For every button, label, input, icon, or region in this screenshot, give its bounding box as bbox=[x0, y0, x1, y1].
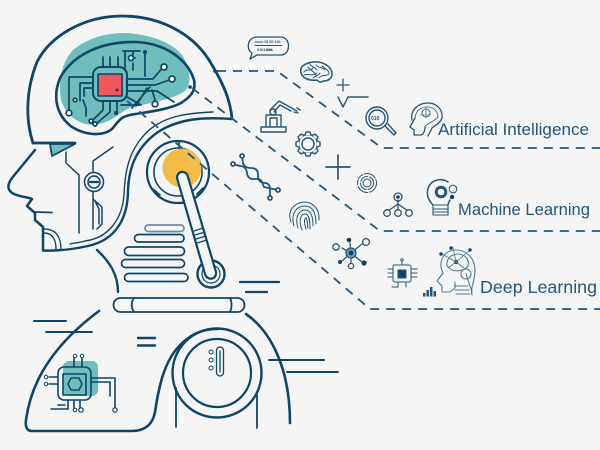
dashed leader lines bbox=[127, 71, 600, 309]
helmet outline bbox=[28, 16, 232, 143]
panel: rib stack bbox=[122, 225, 188, 282]
eye bbox=[50, 144, 75, 156]
neck circuit lines bbox=[66, 147, 113, 233]
icon: fingerprint bbox=[290, 202, 319, 230]
icon: speech bubble: 0101 001 bbox=[257, 48, 273, 52]
icon: network bbox=[333, 238, 369, 269]
panel: robot head bbox=[8, 16, 232, 251]
leader: machine learning bbox=[192, 88, 600, 231]
icon: tree bbox=[384, 193, 412, 216]
neck inner arc bbox=[70, 112, 213, 244]
icon: large plus bbox=[326, 155, 350, 179]
icon: speech bubble bbox=[248, 37, 288, 59]
collar bbox=[114, 298, 244, 312]
neck outer arc bbox=[43, 118, 232, 251]
yellow core bbox=[162, 148, 202, 188]
brain outline bbox=[56, 42, 194, 134]
chin piece bbox=[44, 229, 61, 250]
circuit wires bbox=[66, 51, 175, 126]
icon: speech bubble: 10 00 101 bbox=[264, 40, 281, 44]
leader start dots bbox=[188, 69, 217, 89]
panel: shoulder joint and rod bbox=[147, 141, 224, 288]
icon: plus small bbox=[337, 79, 349, 91]
icon: bars bbox=[423, 287, 436, 296]
label: deep learning: Deep Learning bbox=[480, 277, 597, 297]
panel: torso bbox=[26, 311, 338, 431]
rod bbox=[177, 172, 216, 279]
icon: concentric rings bbox=[358, 174, 376, 192]
icon: robot arm bbox=[261, 101, 300, 132]
lip line bbox=[35, 211, 52, 214]
icon: brain bbox=[301, 62, 332, 82]
icon: magnifier bbox=[366, 107, 396, 135]
teal brain blob bbox=[60, 33, 189, 125]
neck node bbox=[84, 172, 104, 192]
icon: gear bbox=[296, 132, 320, 156]
left torso outline bbox=[26, 311, 217, 431]
speed lines bbox=[240, 282, 279, 292]
label: machine learning: Machine Learning bbox=[458, 200, 590, 219]
icon: small chip bbox=[388, 259, 417, 287]
chip with red core bbox=[93, 67, 127, 101]
rod stripes bbox=[194, 228, 207, 243]
icon: DNA helix bbox=[231, 154, 280, 200]
label: artificial intelligence: Artificial Intelligence bbox=[438, 120, 589, 139]
forehead brow line bbox=[33, 142, 75, 144]
back neck curve bbox=[97, 250, 118, 292]
icon: AI head bbox=[410, 103, 442, 136]
torso chip bbox=[44, 354, 117, 412]
equals sign bbox=[138, 338, 155, 346]
icon: square root bbox=[338, 97, 368, 107]
icon: deep learning head bbox=[437, 246, 475, 295]
joint rings bbox=[147, 141, 209, 203]
leader: deep learning bbox=[127, 101, 600, 309]
large dial bbox=[172, 328, 262, 428]
bottom joint bbox=[198, 260, 224, 288]
icon: lightbulb with gears bbox=[427, 180, 457, 215]
icon: magnifier: 010 bbox=[371, 116, 380, 122]
face profile bbox=[8, 150, 43, 250]
right shoulder bbox=[246, 314, 290, 423]
leader: artificial intelligence bbox=[217, 71, 600, 148]
torso lines bbox=[34, 321, 338, 372]
